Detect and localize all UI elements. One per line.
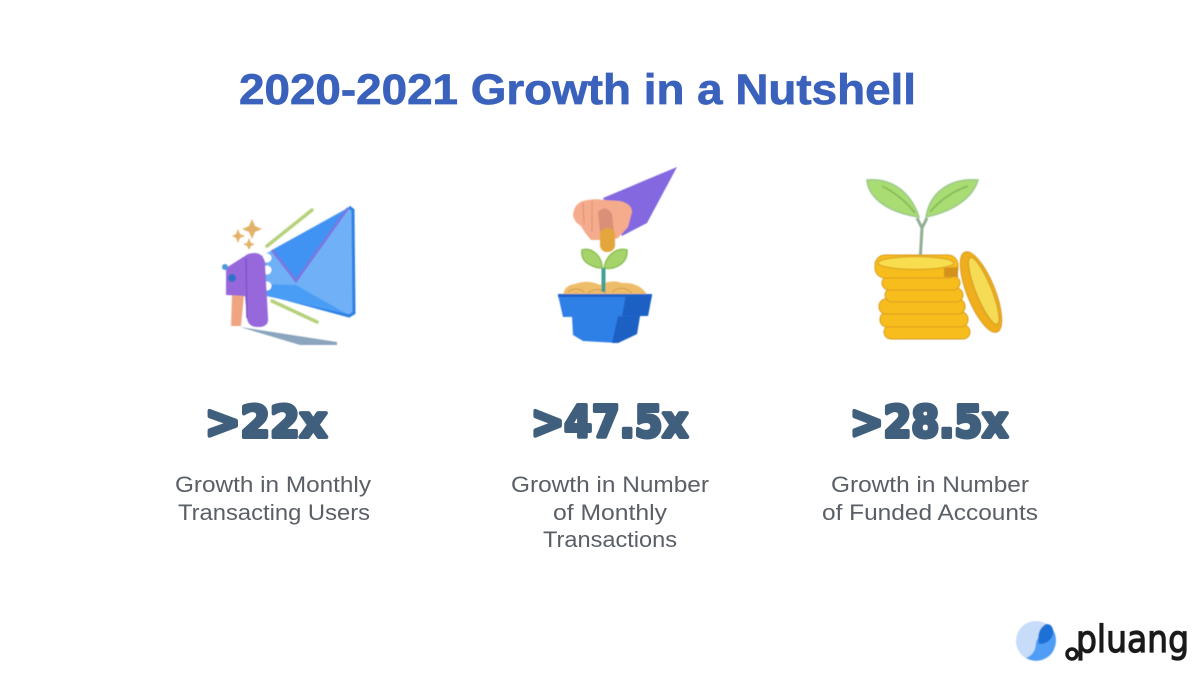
label: growth in number of monthly transactions: [511, 472, 710, 552]
panel: monthly transactions: [511, 167, 710, 552]
icon: sprout on coin stack: [867, 180, 1010, 339]
wordmark: pluang: [1076, 618, 1189, 661]
icon: hand planting coin in pot: [558, 167, 677, 343]
logo: pluang: [1016, 618, 1189, 661]
label: growth in number of funded accounts: [822, 472, 1038, 525]
label: growth in number of funded accounts: of Funded Accounts: [822, 500, 1038, 525]
stat: >47.5x: >47.5x: [531, 397, 688, 448]
label: growth in number of monthly transactions: Transactions: [543, 527, 677, 552]
icon: pluang logo mark: [1016, 621, 1056, 661]
label: growth in monthly transacting users: Growth in Monthly: [175, 472, 372, 497]
stat: >28.5x: >28.5x: [850, 397, 1008, 448]
label: growth in monthly transacting users: [175, 472, 372, 525]
stat: >22x: >22x: [205, 397, 327, 448]
label: growth in number of monthly transactions: Growth in Number: [511, 472, 710, 497]
icon: megaphone with envelope: [222, 207, 354, 345]
label: growth in number of funded accounts: Growth in Number: [831, 472, 1030, 497]
label: growth in number of monthly transactions: of Monthly: [553, 500, 668, 525]
panel: funded accounts: [822, 180, 1038, 525]
title: 2020-2021 Growth in a Nutshell: [239, 66, 916, 114]
panel: monthly transacting users: [175, 207, 372, 525]
label: growth in monthly transacting users: Transacting Users: [178, 500, 370, 525]
